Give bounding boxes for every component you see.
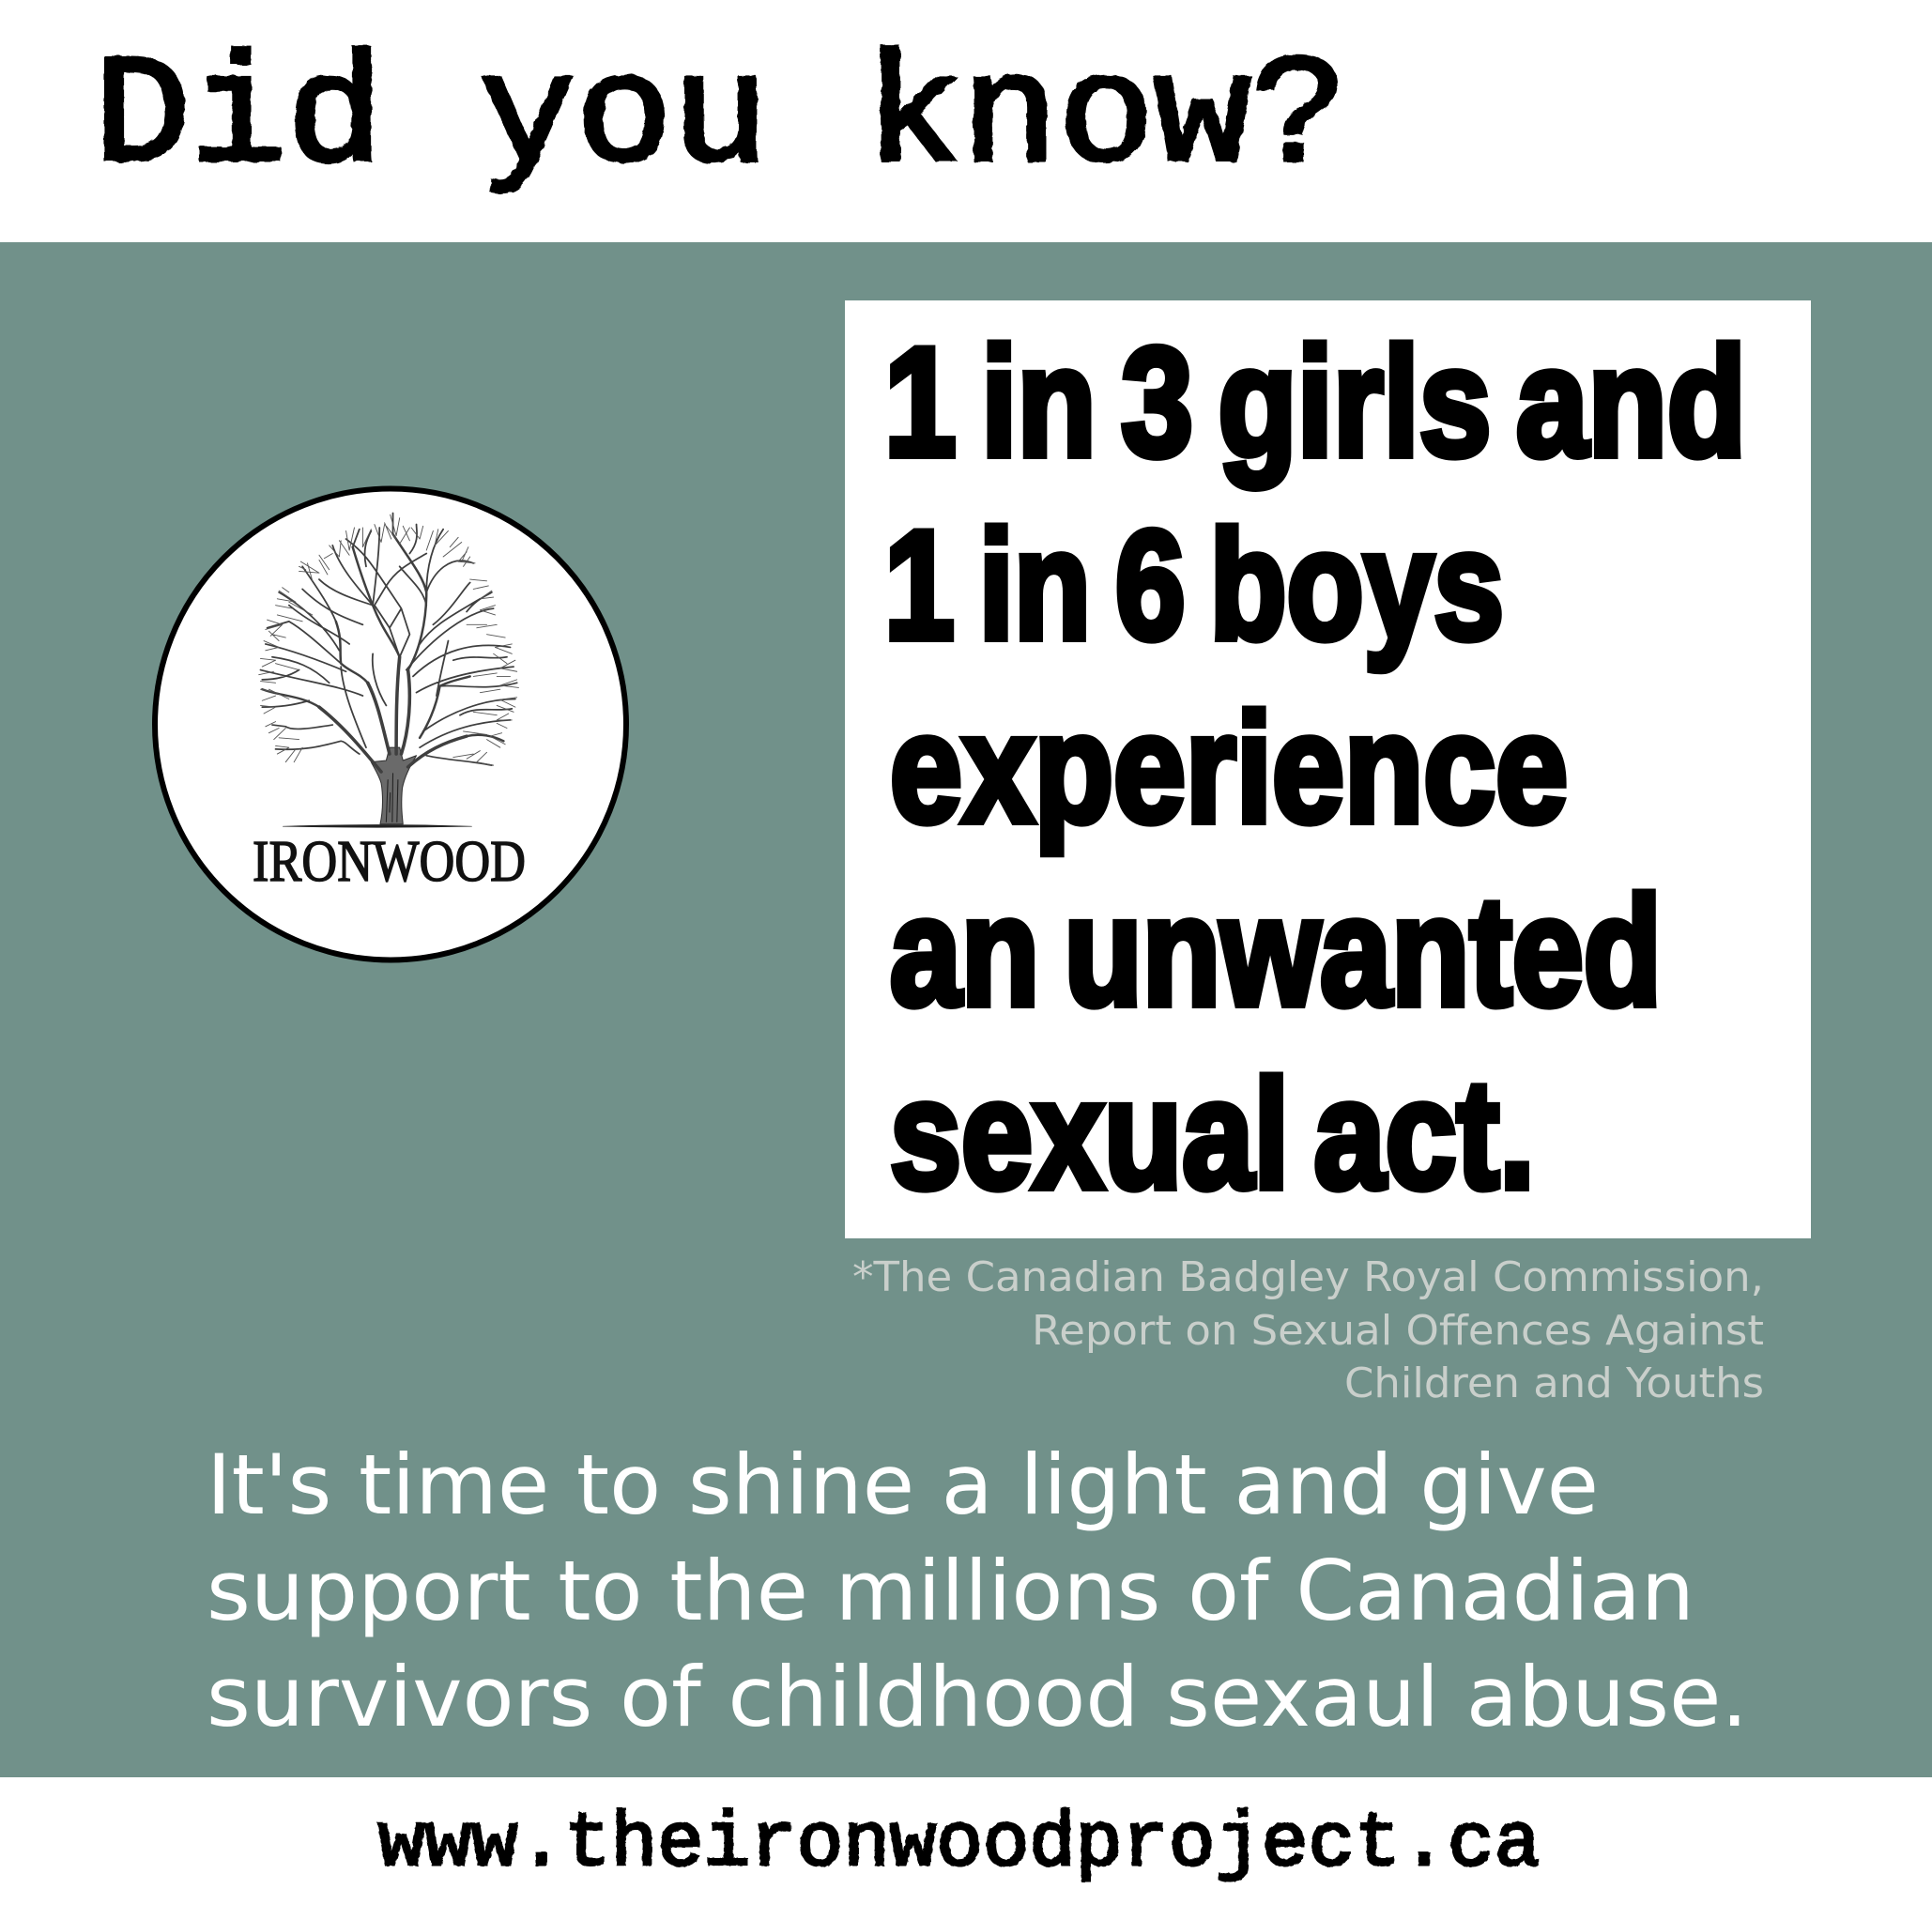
logo: ironwood circle: [155, 488, 626, 960]
call to action text: support to the millions of Canadian: [207, 1543, 1694, 1639]
icon: bare tree: [259, 513, 518, 827]
logo disc: [155, 488, 626, 960]
logo wordmark: IRONWOOD: [253, 830, 526, 894]
call to action text: [207, 1436, 1748, 1745]
source footnote: Children and Youths: [1344, 1359, 1764, 1407]
ground line: [283, 824, 471, 827]
source footnote: *The Canadian Badgley Royal Commission,: [852, 1253, 1764, 1301]
statistic line 1: 1 in 3 girls and: [884, 315, 1746, 488]
panel: green band: [0, 242, 1932, 1777]
source footnote: Report on Sexual Offences Against: [1032, 1307, 1764, 1355]
call to action text: survivors of childhood sexaul abuse.: [207, 1649, 1748, 1745]
source footnote: [852, 1253, 1764, 1407]
call to action text: It's time to shine a light and give: [207, 1436, 1599, 1533]
title: Did you know?: [94, 32, 1347, 207]
statistic box background: [845, 300, 1811, 1238]
statistic line 5: sexual act.: [890, 1048, 1535, 1221]
statistic line 4: an unwanted: [890, 865, 1662, 1037]
statistic line 3: experience: [890, 682, 1568, 854]
website url: www.theironwoodproject.ca: [378, 1801, 1541, 1888]
panel: statistic box: [845, 300, 1811, 1238]
statistic line 2: 1 in 6 boys: [884, 499, 1504, 671]
